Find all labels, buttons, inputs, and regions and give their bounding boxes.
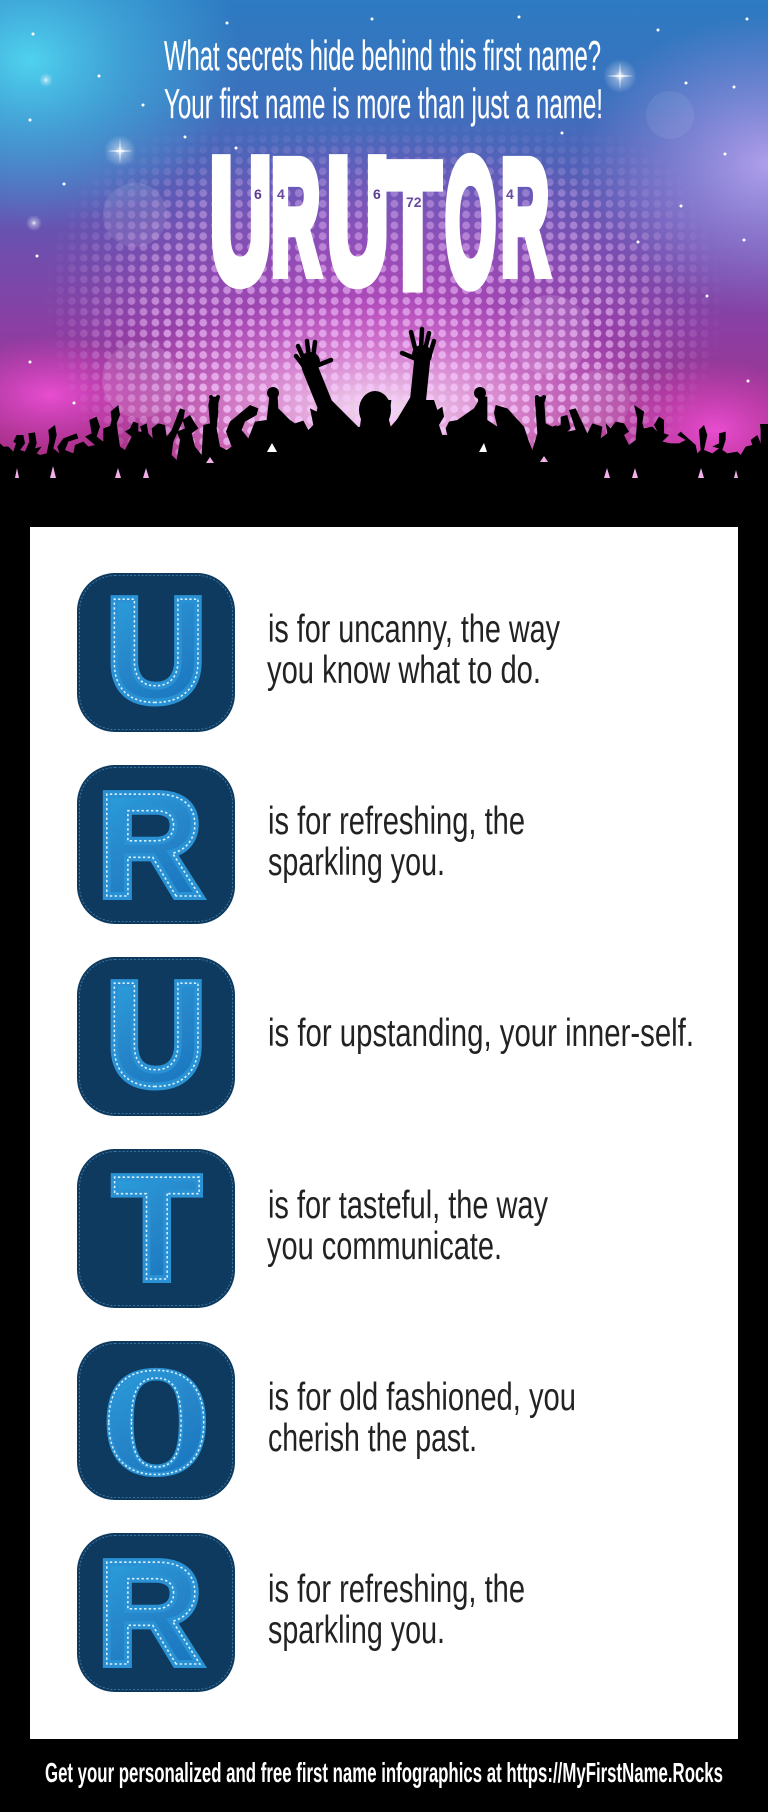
icon: letter R badge: R (97, 763, 203, 928)
icon: letter U badge: U (106, 568, 206, 733)
icon: letter R badge: R (97, 763, 203, 928)
icon: letter T badge: T (113, 1145, 201, 1310)
row 2: letter R (77, 763, 525, 928)
row 6: letter R (77, 1531, 525, 1696)
icon: letter O badge: O (102, 1335, 211, 1507)
text: R meaning (268, 800, 525, 884)
row 1: letter U (77, 568, 560, 733)
text: R meaning (268, 1568, 525, 1652)
row 3: letter U (77, 952, 694, 1117)
name title URUTOR: 6 (254, 186, 262, 202)
icon: letter R badge (77, 1531, 235, 1696)
icon: letter U badge: U (106, 952, 206, 1117)
text: T meaning: is for tasteful, the way (268, 1184, 548, 1227)
icon: letter R badge: R (97, 1531, 203, 1696)
text: O meaning: is for old fashioned, you (268, 1376, 576, 1419)
icon: letter T badge (77, 1145, 235, 1310)
name title URUTOR: T (385, 128, 441, 324)
text: R meaning: is for refreshing, the (268, 1568, 525, 1611)
header background (0, 0, 768, 460)
text: U meaning: is for uncanny, the way (268, 608, 560, 651)
text: R meaning: is for refreshing, the (268, 800, 525, 843)
text: T meaning (267, 1184, 548, 1268)
crowd silhouette (0, 329, 768, 530)
row 5: letter O (77, 1335, 576, 1507)
icon: letter T badge: T (113, 1145, 201, 1310)
name title URUTOR: O (445, 124, 496, 322)
icon: letter U badge: U (106, 952, 206, 1117)
icon: letter R badge (77, 763, 235, 928)
name title URUTOR: 6 (373, 186, 381, 202)
icon: letter O badge (77, 1335, 235, 1507)
icon: letter R badge: R (97, 1531, 203, 1696)
name title URUTOR: 4 (506, 186, 514, 202)
name title URUTOR: R (501, 128, 549, 306)
white content panel (30, 527, 738, 1739)
text: O meaning (268, 1376, 576, 1460)
name title URUTOR: R (271, 129, 320, 308)
header question text (164, 32, 603, 127)
text: T meaning: you communicate. (267, 1225, 502, 1268)
text: R meaning: sparkling you. (268, 841, 445, 884)
icon: letter U badge (77, 952, 235, 1117)
text: U meaning: you know what to do. (267, 649, 541, 692)
text: O meaning: cherish the past. (268, 1417, 477, 1460)
icon: letter O badge: O (102, 1335, 211, 1507)
text: R meaning: sparkling you. (268, 1609, 445, 1652)
name title URUTOR: 4 (277, 186, 285, 202)
icon: letter U badge (77, 568, 235, 733)
row 4: letter T (77, 1145, 548, 1310)
icon: letter U badge: U (106, 568, 206, 733)
text: U meaning (267, 608, 560, 692)
name title URUTOR: U (327, 123, 389, 319)
name title URUTOR: 72 (406, 194, 422, 210)
name title URUTOR (210, 123, 549, 324)
sparkles (26, 16, 750, 404)
name title URUTOR: U (210, 123, 272, 319)
